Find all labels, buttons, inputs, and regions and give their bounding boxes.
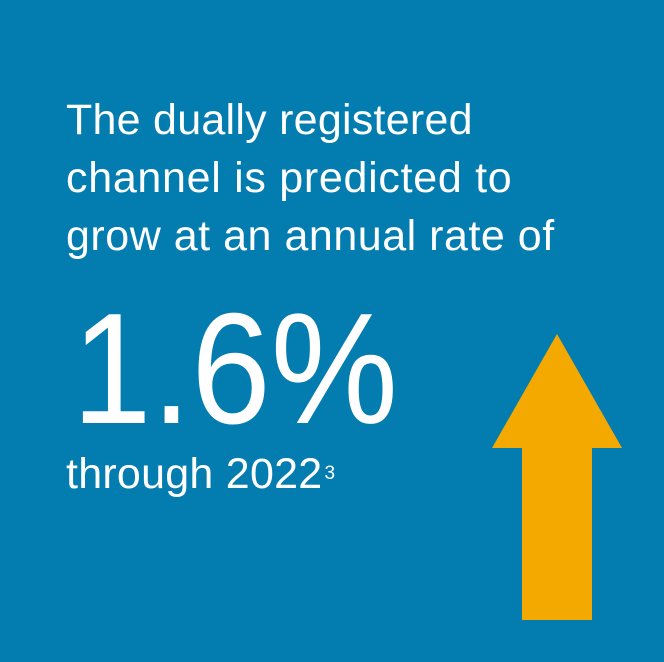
heading text: grow at an annual rate of xyxy=(66,212,555,260)
subtext: through 2022: through 20223 xyxy=(66,450,335,498)
heading text xyxy=(66,96,555,260)
heading text: channel is predicted to xyxy=(66,154,512,202)
big number: 1.6%: 1.6% xyxy=(72,281,398,457)
heading text: The dually registered xyxy=(66,96,473,144)
